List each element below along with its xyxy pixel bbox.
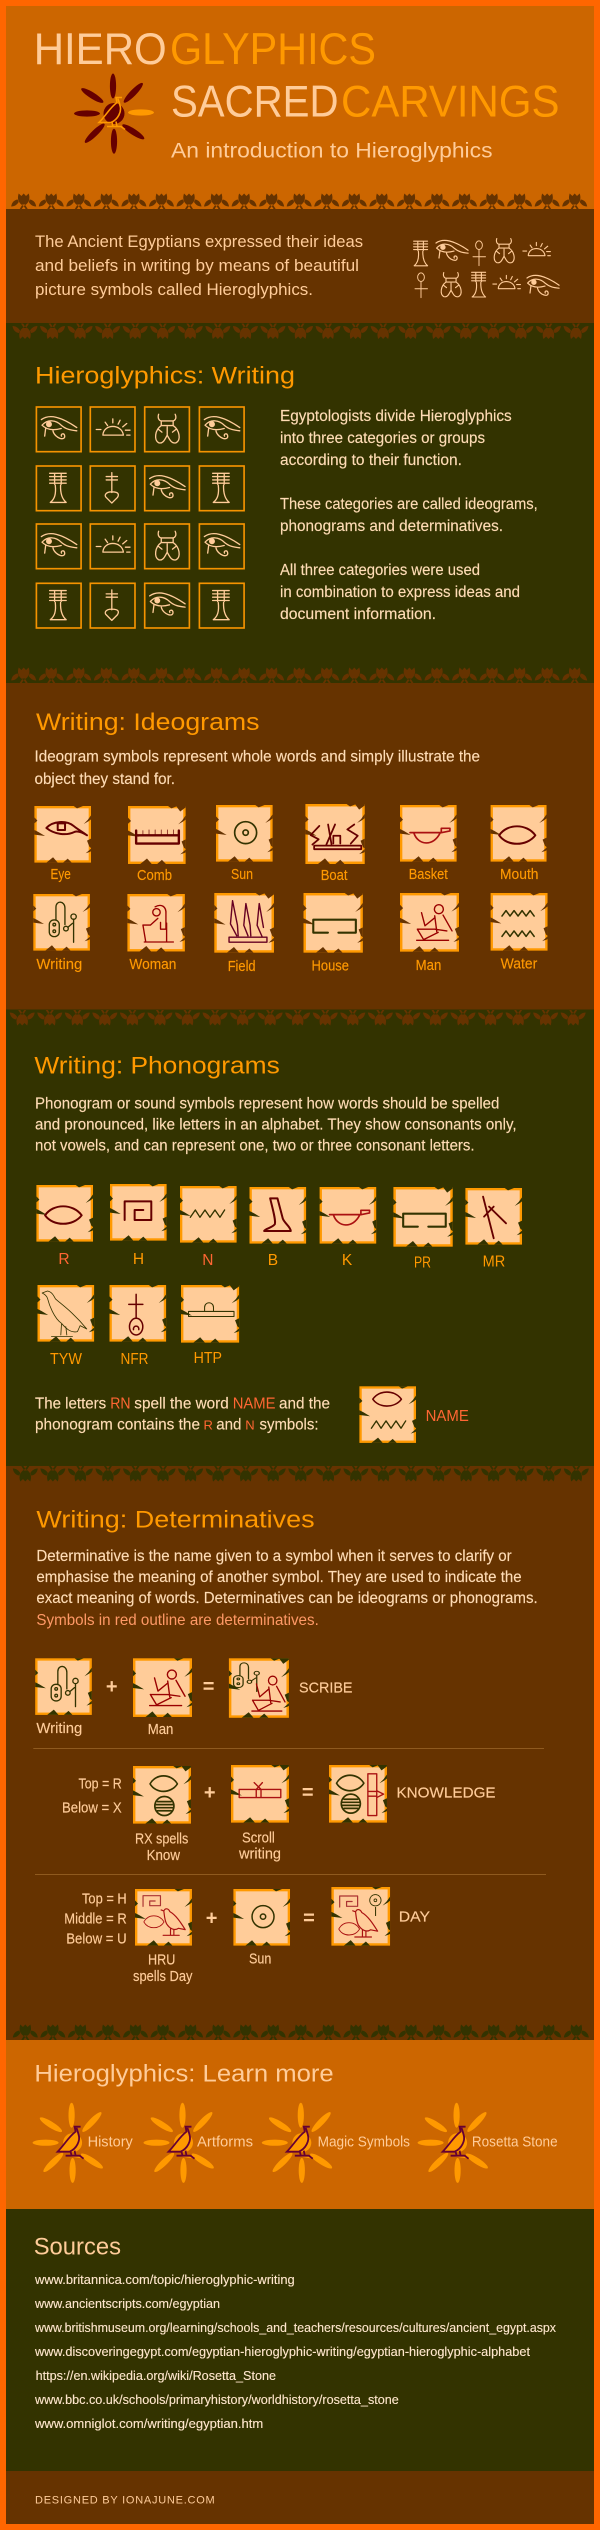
text block: categories: [280, 408, 538, 623]
symbol: eye: Eye: [50, 867, 71, 883]
symbol: B: B: [268, 1252, 278, 1269]
intro text: picture symbols called Hieroglyphics.: [35, 281, 313, 299]
equation: knowledge: RX spells: [135, 1831, 188, 1847]
equation: knowledge: Below = X: [62, 1800, 122, 1816]
source list: www.britishmuseum.org/learning/schools_and_teachers/resources/cultures/ancient_egypt.aspx: [34, 2320, 556, 2335]
text block: RN spells NAME: N: [245, 1417, 255, 1432]
equation: scribe: Writing: [36, 1721, 82, 1737]
symbol: R: [36, 1185, 93, 1268]
equation: scribe: +: [106, 1676, 118, 1698]
link: Rosetta Stone: Rosetta Stone: [472, 2134, 558, 2151]
text block: RN spells NAME: R: [204, 1417, 213, 1432]
symbol: man: [400, 893, 459, 974]
intro text: [35, 233, 363, 299]
panel: ideograms: [6, 683, 594, 1010]
symbol: field: [214, 893, 274, 975]
link: Magic Symbols: Magic Symbols: [318, 2134, 410, 2151]
subtitle: An introduction to Hieroglyphics: [171, 140, 493, 163]
source list: www.bbc.co.uk/schools/primaryhistory/worldhistory/rosetta_stone: [34, 2392, 399, 2407]
panel: phonograms: [6, 1010, 594, 1466]
equation: knowledge: Top = R: [78, 1776, 122, 1792]
text block: categories: These categories are called ideograms,: [280, 496, 538, 513]
symbol: writing: Writing: [36, 957, 82, 973]
text block: [36, 1548, 538, 1629]
equation: knowledge: [62, 1765, 496, 1864]
text block: categories: according to their function.: [280, 452, 462, 469]
symbol: K: [320, 1187, 376, 1269]
source list: www.omniglot.com/writing/egyptian.htm: [34, 2416, 263, 2431]
text block: categories: phonograms and determinatives.: [280, 518, 503, 535]
symbol: B: [250, 1187, 306, 1269]
symbol: comb: [128, 806, 186, 884]
text block: RN spells NAME: spell the word: [134, 1395, 229, 1412]
text block: exact meaning of words. Determinatives can be ideograms or phonograms.: [36, 1590, 538, 1607]
symbol: N: N: [202, 1252, 213, 1269]
text block: emphasise the meaning of another symbol. They are used to indicate the: [36, 1569, 522, 1586]
text block: Ideogram symbols represent whole words and simply illustrate the: [34, 749, 480, 766]
equation: knowledge: KNOWLEDGE: [396, 1786, 496, 1802]
text block: not vowels, and can represent one, two or three consonant letters.: [35, 1137, 475, 1154]
equation: day: Below = U: [66, 1931, 127, 1947]
lotus border: [11, 194, 587, 209]
link: Artforms: Artforms: [197, 2134, 253, 2151]
source list: www.ancientscripts.com/egyptian: [34, 2296, 220, 2311]
symbol: water: Water: [501, 956, 537, 972]
symbol: water: [491, 893, 548, 972]
text block: RN spells NAME: NAME: [233, 1395, 276, 1412]
symbol: H: [110, 1184, 167, 1268]
text block: categories: in combination to express ideas and: [280, 584, 520, 601]
equation: knowledge: writing: [238, 1846, 281, 1862]
text block: RN spells NAME: RN: [110, 1395, 130, 1412]
equation: knowledge: Scroll: [242, 1830, 275, 1846]
title: CARVINGS: [341, 78, 560, 127]
link: Artforms: [144, 2103, 253, 2183]
symbol: man: Man: [416, 958, 441, 974]
symbol: sun: Sun: [231, 867, 253, 883]
symbol: TYW: TYW: [50, 1351, 83, 1368]
equation: day: spells Day: [133, 1969, 193, 1985]
text block: Determinative is the name given to a symbol when it serves to clarify or: [36, 1548, 512, 1565]
symbol: mouth: [491, 805, 547, 883]
panel: footer: [6, 2471, 594, 2524]
equation: scribe: [35, 1658, 353, 1738]
text block: RN spells NAME: [35, 1395, 330, 1433]
symbol: basket: [400, 805, 457, 883]
heading: Sources: [34, 2233, 121, 2260]
text block: Symbols in red outline are determinatives.: [36, 1612, 319, 1629]
symbol: house: [304, 893, 363, 974]
text block: RN spells NAME: The letters: [35, 1395, 106, 1412]
symbol: H: H: [133, 1251, 144, 1268]
link: Magic Symbols: [262, 2103, 410, 2183]
equation: scribe: SCRIBE: [299, 1681, 353, 1697]
panel: learn more: [6, 2040, 594, 2209]
source list: https://en.wikipedia.org/wiki/Rosetta_Stone: [36, 2368, 276, 2383]
panel: header: [6, 6, 594, 209]
symbol: R: R: [58, 1251, 70, 1268]
symbol: comb: Comb: [137, 868, 172, 884]
symbol: boat: Boat: [321, 868, 348, 884]
equation: scribe: =: [203, 1676, 214, 1698]
icon grid: [36, 407, 244, 628]
credit: DESIGNED BY IONAJUNE.COM: [35, 2494, 215, 2506]
heading: Writing: Determinatives: [36, 1506, 315, 1533]
heading: Hieroglyphics: Writing: [35, 362, 295, 389]
symbol: sun: [216, 805, 273, 883]
symbol: boat: [305, 804, 365, 884]
text block: [35, 1095, 517, 1154]
equation: knowledge: +: [204, 1782, 216, 1804]
symbol: eye: [34, 806, 91, 883]
symbol: woman: [127, 894, 185, 973]
text block: RN spells NAME: and: [216, 1416, 242, 1433]
symbol: N: [180, 1186, 237, 1269]
text block: Phonogram or sound symbols represent how words should be spelled: [35, 1095, 499, 1112]
heading: Writing: Ideograms: [36, 709, 260, 736]
symbol: writing: [33, 894, 90, 973]
link: History: [33, 2103, 133, 2183]
symbol: NAME: NAME: [426, 1408, 469, 1425]
source list: www.discoveringegypt.com/egyptian-hieroglyphic-writing/egyptian-hieroglyphic-alphabet: [34, 2344, 530, 2359]
text block: RN spells NAME: and the: [279, 1395, 330, 1412]
text block: categories: into three categories or groups: [280, 430, 485, 447]
heading: Hieroglyphics: Learn more: [34, 2061, 334, 2088]
intro text: and beliefs in writing by means of beautiful: [35, 257, 359, 275]
symbol: MR: [465, 1188, 522, 1271]
symbol: NFR: NFR: [120, 1351, 148, 1368]
equation: scribe: Man: [148, 1722, 173, 1738]
equation: day: +: [206, 1908, 217, 1930]
source list: [34, 2272, 556, 2431]
equation: day: Sun: [249, 1951, 271, 1967]
icon: sun logo with bird: [74, 74, 154, 154]
source list: www.britannica.com/topic/hieroglyphic-writing: [34, 2272, 295, 2287]
panel: sources: [6, 2209, 594, 2471]
equation: day: Top = H: [82, 1891, 127, 1907]
symbol: K: K: [342, 1252, 353, 1269]
equation: knowledge: Know: [147, 1848, 180, 1864]
symbol: basket: Basket: [409, 867, 448, 883]
symbol: field: Field: [228, 959, 256, 975]
title: [34, 25, 559, 127]
text block: categories: All three categories were used: [280, 562, 480, 579]
title: HIERO: [34, 25, 167, 74]
title: GLYPHICS: [170, 25, 376, 74]
text block: categories: document information.: [280, 606, 436, 623]
equation: day: [64, 1887, 430, 1985]
equation: day: Middle = R: [64, 1911, 127, 1927]
symbol: woman: Woman: [129, 957, 176, 973]
panel: writing: [6, 323, 594, 683]
link: History: History: [88, 2134, 133, 2151]
symbol: house: House: [312, 958, 349, 974]
text block: RN spells NAME: phonogram contains the: [35, 1416, 200, 1433]
equation: knowledge: =: [302, 1782, 314, 1804]
equation: day: =: [303, 1908, 315, 1930]
symbol: MR: MR: [483, 1254, 505, 1271]
equation: day: DAY: [399, 1910, 430, 1926]
symbol: NAME: [359, 1386, 469, 1443]
equation: day: HRU: [148, 1952, 175, 1968]
symbol: NFR: [110, 1285, 166, 1368]
symbol: HTP: [181, 1285, 239, 1367]
text block: [34, 749, 480, 788]
symbol: mouth: Mouth: [500, 867, 538, 883]
panel: determinatives: [6, 1466, 594, 2040]
text block: categories: Egyptologists divide Hieroglyphics: [280, 408, 512, 425]
intro text: The Ancient Egyptians expressed their ideas: [35, 233, 363, 251]
title: SACRED: [171, 78, 338, 127]
text block: and pronounced, like letters in an alphabet. They show consonants only,: [35, 1116, 517, 1133]
symbol: TYW: [38, 1285, 94, 1368]
text block: RN spells NAME: symbols:: [260, 1416, 318, 1433]
text block: object they stand for.: [34, 771, 175, 788]
icons: small hieroglyph row: [414, 239, 559, 298]
heading: Writing: Phonograms: [34, 1052, 280, 1079]
symbol: PR: [393, 1187, 453, 1272]
panel: introduction: [6, 209, 594, 323]
link: Rosetta Stone: [418, 2103, 558, 2183]
symbol: HTP: HTP: [194, 1350, 222, 1367]
symbol: PR: PR: [414, 1255, 431, 1272]
